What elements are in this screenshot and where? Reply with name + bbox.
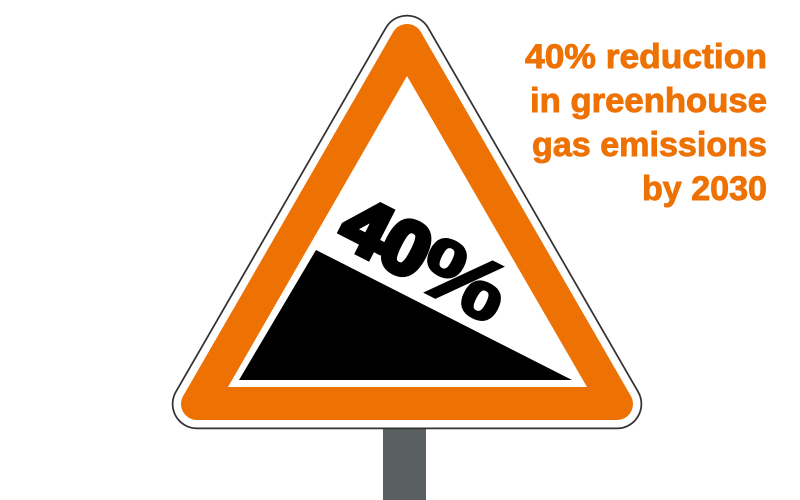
slope percentage label (327, 179, 525, 342)
headline: in greenhouse (530, 82, 767, 120)
headline (525, 38, 767, 208)
sign post (383, 427, 426, 500)
sign white interior (228, 76, 587, 387)
headline: 40% reduction (525, 38, 767, 76)
slope percentage label: 40 (327, 179, 446, 296)
sign orange border (197, 40, 617, 404)
slope percentage label: % (403, 217, 525, 342)
sign white edge (197, 40, 617, 404)
road sign (197, 40, 617, 404)
slope graphic (239, 250, 572, 380)
headline: gas emissions (532, 126, 767, 164)
headline: by 2030 (642, 170, 767, 208)
sign outer outline (197, 40, 617, 404)
